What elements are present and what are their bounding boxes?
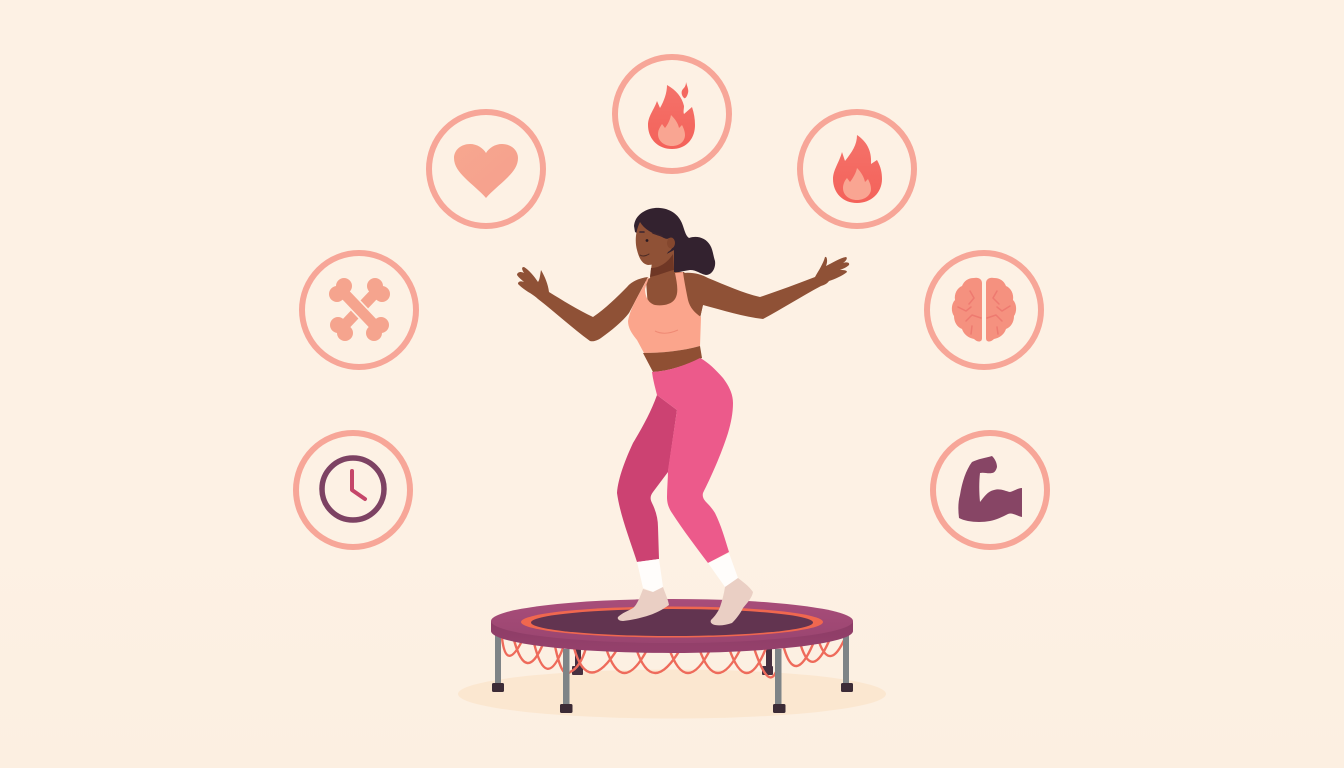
orange ring: [521, 606, 823, 638]
woman jumping: [517, 208, 849, 625]
icon: heart in ring: [429, 112, 543, 226]
ground shadow: [458, 670, 886, 718]
icon: flame with spark in ring: [615, 57, 729, 171]
hair: [634, 208, 715, 275]
icon: brain in ring: [927, 253, 1041, 367]
frame rim top: [491, 599, 853, 643]
back legs: [572, 648, 773, 675]
face: [636, 222, 673, 265]
arm: left: [517, 267, 648, 341]
icon: flame in ring: [800, 112, 914, 226]
side legs: [492, 632, 853, 692]
shoes: [618, 587, 669, 621]
icon: crossed bones in ring: [302, 253, 416, 367]
ear: [667, 238, 675, 248]
icon: flexed muscle in ring: [933, 433, 1047, 547]
midriff: [643, 346, 702, 372]
jumping mat: [531, 609, 813, 636]
frame rim side: [491, 621, 853, 653]
front legs: [560, 649, 786, 713]
neck shadow: [650, 254, 674, 277]
top seam: [655, 330, 678, 333]
socks: [637, 559, 663, 592]
back leg: [617, 395, 677, 562]
facial features: [640, 232, 662, 256]
icon: clock in ring: [296, 433, 410, 547]
trampoline: [491, 599, 853, 713]
spring net: [502, 638, 845, 677]
arm: right: [683, 257, 849, 319]
crop top: [628, 272, 701, 353]
front leg: [652, 358, 733, 563]
neck and chest skin: [646, 250, 704, 318]
